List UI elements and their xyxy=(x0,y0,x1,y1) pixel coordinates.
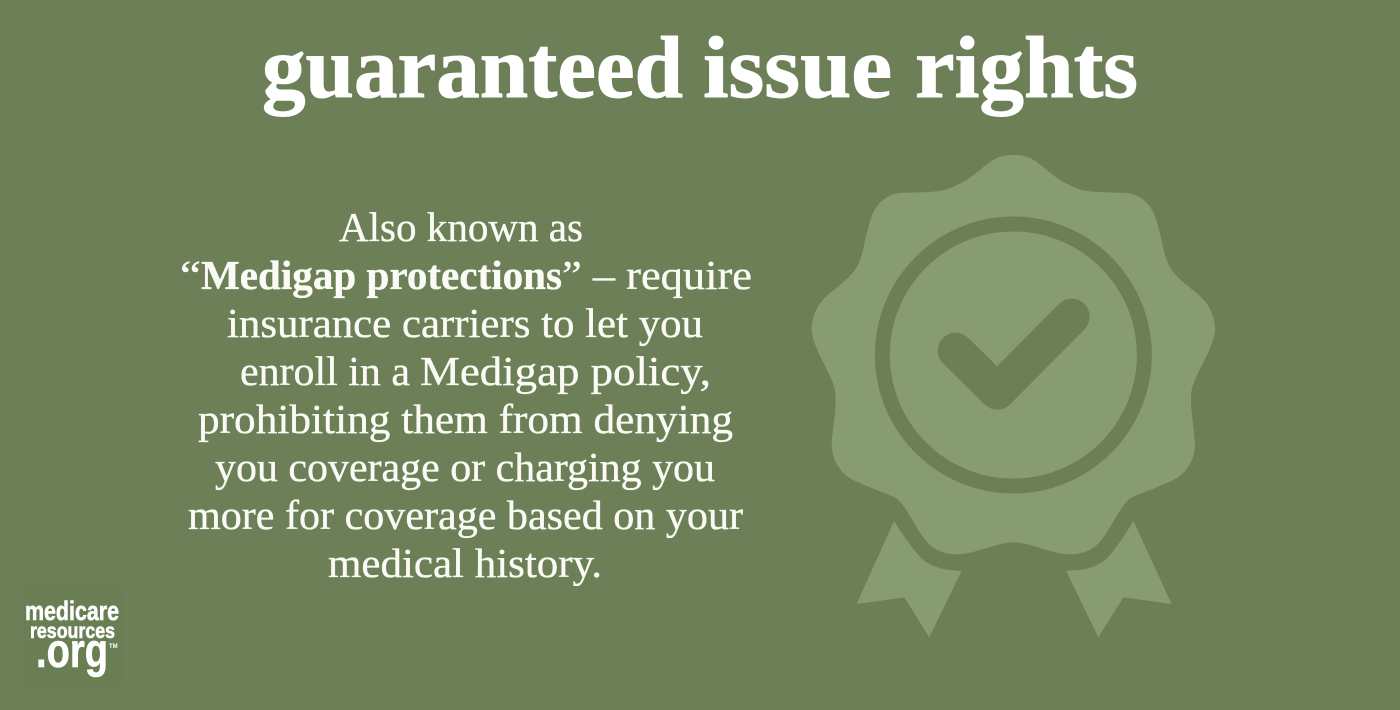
left ribbon xyxy=(857,521,962,637)
badge ring xyxy=(882,224,1144,486)
text block: definition: insurance carriers to let you xyxy=(227,300,703,346)
right ribbon xyxy=(1066,521,1172,637)
title: guaranteed xyxy=(262,20,683,117)
badge body xyxy=(812,155,1215,554)
logo word: .org: .org xyxy=(36,625,108,678)
logo: medicareresources.org xyxy=(22,586,123,686)
logo word: resources: resources xyxy=(30,620,115,643)
text block: definition xyxy=(180,204,752,586)
text block: definition: ” – require xyxy=(562,252,752,298)
icon: award badge with check mark xyxy=(812,155,1215,637)
text block: definition: Medigap policy, xyxy=(420,348,711,394)
title xyxy=(262,20,1138,117)
text block: definition: Medigap protections xyxy=(201,252,562,298)
text block: definition: more for coverage based on your xyxy=(188,492,743,538)
logo trademark: TM xyxy=(109,644,118,650)
text block: definition: prohibiting them from denying xyxy=(198,396,733,442)
text block: definition: medical history. xyxy=(328,540,602,586)
logo word: medicare: medicare xyxy=(25,596,119,626)
title: issue xyxy=(703,20,892,117)
logo background xyxy=(22,586,123,686)
text block: definition: “ xyxy=(180,252,201,298)
text block: definition: enroll in a xyxy=(240,348,410,394)
text block: definition: you coverage or charging you xyxy=(215,444,715,490)
text block: definition: Also known as xyxy=(339,204,583,250)
check mark xyxy=(956,317,1072,392)
title: rights xyxy=(915,20,1138,117)
